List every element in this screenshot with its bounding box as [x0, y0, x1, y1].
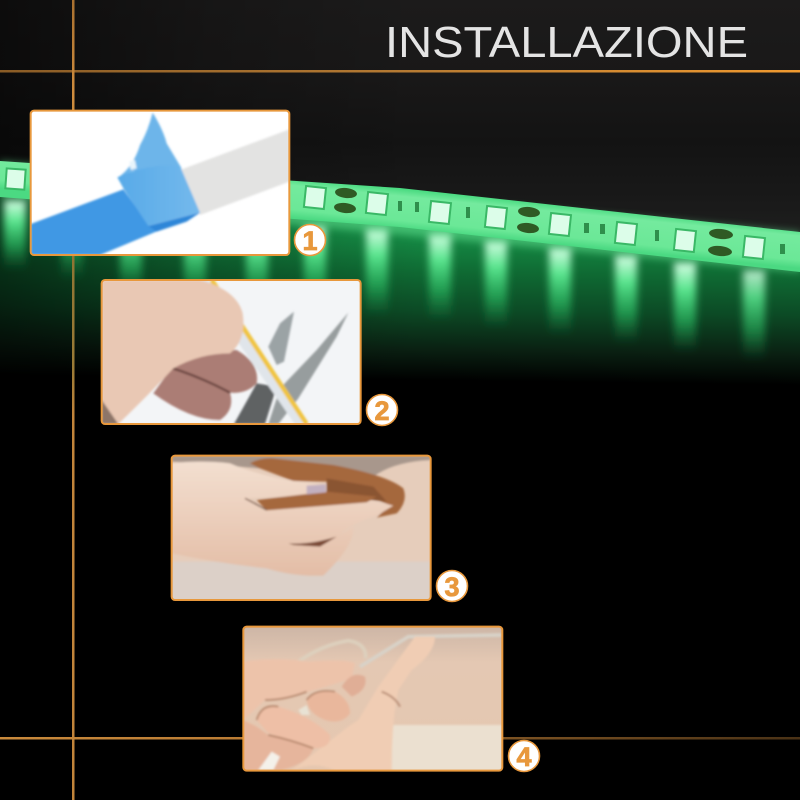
badge: step 3: [436, 570, 468, 602]
badge: step 1: 1: [302, 226, 318, 256]
title: INSTALLAZIONE: [385, 18, 748, 67]
panel: step 4 apply the strip: [243, 627, 502, 771]
resistor marks: [398, 201, 785, 254]
badge: step 1: [294, 224, 326, 256]
green light reflections: [4, 200, 765, 360]
LED strip: [0, 161, 800, 272]
panel: step 2 cut the strip: [102, 280, 361, 424]
badge: step 2: 2: [374, 396, 390, 426]
panel: step 1 peel the tape: [31, 111, 289, 255]
panel: step 3 clean the surface: [172, 456, 431, 600]
badge: step 4: 4: [516, 742, 532, 772]
solder pads: [334, 187, 733, 257]
LED chips: [5, 168, 765, 259]
badge: step 4: [508, 740, 540, 772]
badge: step 2: [366, 394, 398, 426]
badge: step 3: 3: [444, 572, 460, 602]
